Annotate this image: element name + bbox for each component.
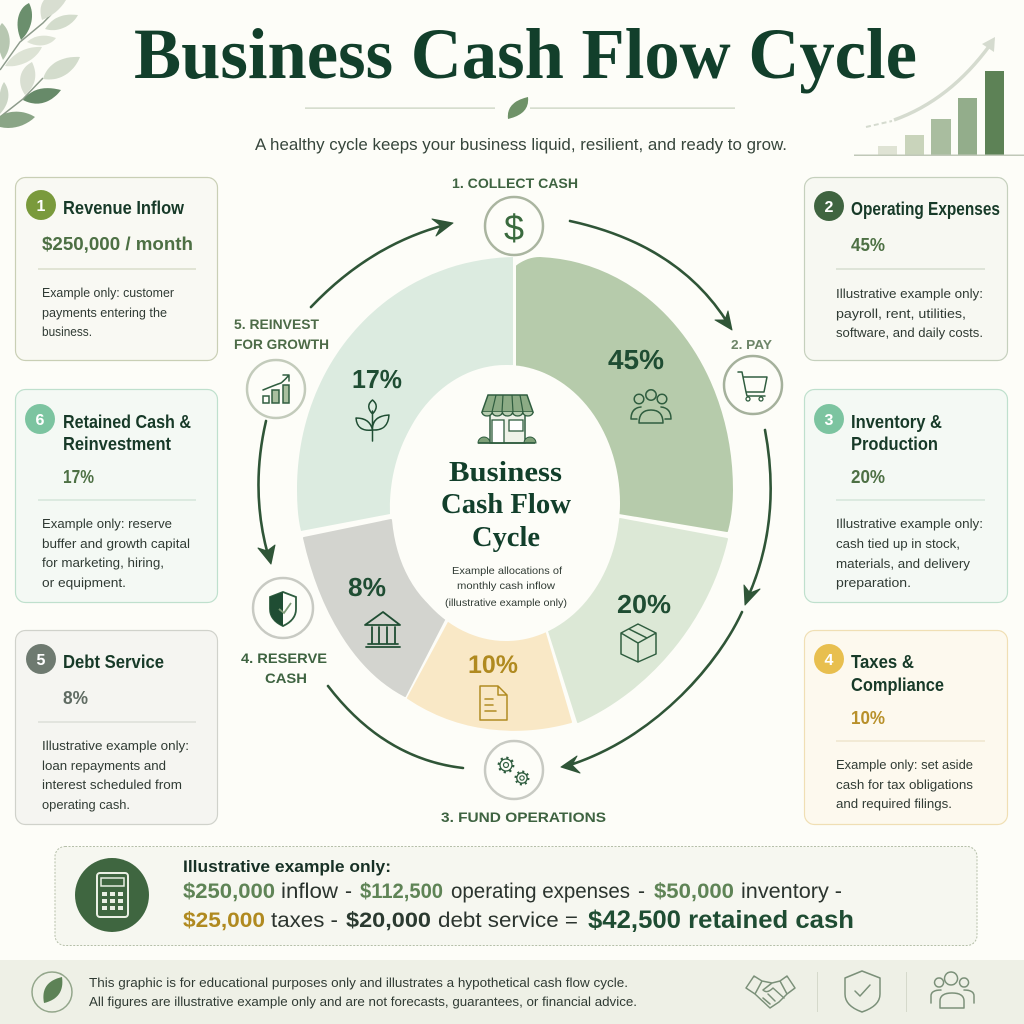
segment: 17% retained cash [297, 257, 513, 531]
panel: debt service: operating cash. [42, 797, 130, 812]
panel: revenue inflow: 1 [37, 198, 46, 215]
panel: inventory and production [804, 390, 1008, 602]
footer disclaimer band: All figures are illustrative example only and are not forecasts, guarantees, or financial advice. [89, 994, 637, 1009]
icon: storefront [478, 395, 536, 443]
panel: illustrative calculation: $112,500 [360, 880, 443, 903]
panel: illustrative calculation: - [638, 880, 645, 903]
panel: revenue inflow: Revenue Inflow [63, 198, 185, 218]
segment: 10% taxes [408, 622, 571, 730]
step 4: reserve cash: 4. RESERVE [241, 650, 327, 666]
icon: calculator [75, 858, 149, 932]
step 2: pay [724, 337, 782, 414]
panel: operating expenses: 2 [825, 199, 834, 216]
panel: operating expenses: 45% [851, 235, 885, 255]
panel: illustrative calculation: debt service = [438, 909, 578, 932]
arrow: reserve to reinvest [258, 421, 275, 564]
panel: illustrative calculation: $25,000 [183, 909, 265, 932]
icon: leaf badge [32, 972, 72, 1012]
step 1: collect cash: $ [504, 207, 524, 248]
segment: 20% inventory [549, 519, 727, 722]
panel: debt service: interest scheduled from [42, 777, 182, 792]
panel: taxes and compliance: cash for tax obligations [836, 777, 974, 792]
step 1: collect cash: 1. COLLECT CASH [452, 175, 578, 191]
panel: illustrative calculation: $250,000 [183, 880, 275, 903]
panel: revenue inflow: payments entering the [42, 305, 167, 320]
panel: operating expenses: Illustrative example only: [836, 286, 983, 301]
panel: retained cash and reinvestment: buffer and growth capital [42, 536, 190, 551]
panel: illustrative calculation: inflow [281, 880, 339, 903]
panel: revenue inflow [16, 178, 218, 360]
panel: taxes and compliance: Compliance [851, 675, 944, 695]
arrow: pay to fund operations [744, 430, 771, 605]
panel: taxes and compliance: 10% [851, 708, 885, 728]
segment: 45% operating expenses [517, 258, 732, 531]
segment: 10% taxes: 10% [468, 651, 518, 679]
segment: 8% debt service [304, 520, 445, 696]
panel: illustrative calculation: $50,000 [654, 880, 734, 903]
step 4: reserve cash [241, 578, 327, 686]
panel: taxes and compliance: 4 [825, 652, 834, 669]
title divider with leaf [305, 97, 735, 119]
panel: debt service [16, 630, 218, 824]
panel: illustrative calculation: inventory - [741, 880, 842, 903]
panel: revenue inflow: $250,000 / month [42, 234, 193, 254]
icon: handshake [746, 976, 795, 1008]
panel: retained cash and reinvestment: 6 [36, 412, 45, 429]
panel: retained cash and reinvestment: Example only: reserve [42, 516, 172, 531]
panel: inventory and production: cash tied up in stock, [836, 536, 960, 551]
step 1: collect cash [452, 175, 578, 255]
panel: retained cash and reinvestment: or equipment. [42, 575, 126, 590]
panel: inventory and production: Inventory & [851, 412, 942, 432]
panel: illustrative calculation: taxes - [271, 909, 338, 932]
panel: debt service: 5 [37, 652, 46, 669]
decoration: growth bar chart [854, 37, 1024, 156]
segment: 20% inventory: 20% [617, 589, 671, 619]
panel: inventory and production: 20% [851, 467, 885, 487]
icon: shield check [845, 971, 880, 1012]
panel: taxes and compliance: and required filings. [836, 796, 952, 811]
panel: inventory and production: preparation. [836, 575, 911, 590]
step 4: reserve cash: CASH [265, 670, 307, 686]
center hub: (illustrative example only) [445, 597, 567, 609]
panel: retained cash and reinvestment: 17% [63, 467, 94, 487]
center hub: Business [449, 457, 562, 488]
center hub [392, 365, 620, 641]
panel: illustrative calculation: $42,500 retained cash [588, 906, 854, 934]
center hub: Example allocations of [452, 565, 562, 577]
center hub: Cash Flow [441, 489, 572, 520]
decoration: leaf branch [0, 0, 80, 128]
panel: illustrative calculation: operating expenses [451, 880, 630, 903]
panel: inventory and production: Illustrative example only: [836, 516, 983, 531]
panel: operating expenses: payroll, rent, utilities, [836, 306, 966, 321]
chart: cash allocation donut [297, 257, 732, 730]
center hub: Cycle [472, 522, 540, 553]
icon: team [631, 390, 671, 423]
step 3: fund operations: 3. FUND OPERATIONS [441, 809, 606, 825]
panel: revenue inflow: Example only: customer [42, 285, 175, 300]
panel: retained cash and reinvestment: Retained Cash & [63, 412, 191, 432]
panel: operating expenses: software, and daily costs. [836, 325, 983, 340]
arrow: fund operations to reserve [328, 686, 463, 768]
panel: taxes and compliance: Taxes & [851, 652, 914, 672]
segment: 8% debt service: 8% [348, 572, 386, 602]
panel: revenue inflow: business. [42, 324, 92, 339]
arrow: into fund operations [561, 612, 742, 773]
panel: inventory and production: materials, and delivery [836, 556, 971, 571]
panel: inventory and production: 3 [825, 412, 834, 429]
panel: operating expenses: Operating Expenses [851, 199, 1000, 219]
panel: illustrative calculation: - [345, 880, 352, 903]
icon: people [931, 972, 974, 1008]
panel: retained cash and reinvestment: for marketing, hiring, [42, 555, 164, 570]
panel: debt service: 8% [63, 688, 88, 708]
footer disclaimer band [0, 960, 1024, 1024]
segment: 17% retained cash: 17% [352, 364, 402, 394]
panel: illustrative calculation: Illustrative example only: [183, 857, 391, 876]
panel: debt service: Illustrative example only: [42, 738, 189, 753]
panel: operating expenses [804, 178, 1008, 360]
panel: inventory and production: Production [851, 434, 938, 454]
panel: illustrative calculation [55, 846, 977, 946]
panel: retained cash and reinvestment [16, 390, 218, 602]
title: Business Cash Flow Cycle [134, 14, 917, 94]
center hub: monthly cash inflow [457, 580, 555, 592]
panel: debt service: loan repayments and [42, 758, 166, 773]
step 2: pay: 2. PAY [731, 337, 772, 352]
arrow: reinvest to collect [311, 219, 453, 307]
step 5: reinvest for growth: 5. REINVEST [234, 316, 319, 332]
panel: taxes and compliance: Example only: set aside [836, 757, 973, 772]
panel: debt service: Debt Service [63, 652, 164, 672]
arrow: collect to pay [570, 221, 732, 330]
panel: taxes and compliance [804, 630, 1008, 824]
step 3: fund operations [441, 741, 606, 825]
subtitle: A healthy cycle keeps your business liquid, resilient, and ready to grow. [255, 135, 787, 154]
segment: 45% operating expenses: 45% [608, 344, 664, 375]
panel: retained cash and reinvestment: Reinvestment [63, 434, 171, 454]
step 5: reinvest for growth: FOR GROWTH [234, 336, 329, 352]
step 5: reinvest for growth [234, 316, 329, 418]
footer disclaimer band: This graphic is for educational purposes only and illustrates a hypothetical cash flow cycle. [89, 975, 628, 990]
panel: illustrative calculation: $20,000 [346, 909, 431, 932]
